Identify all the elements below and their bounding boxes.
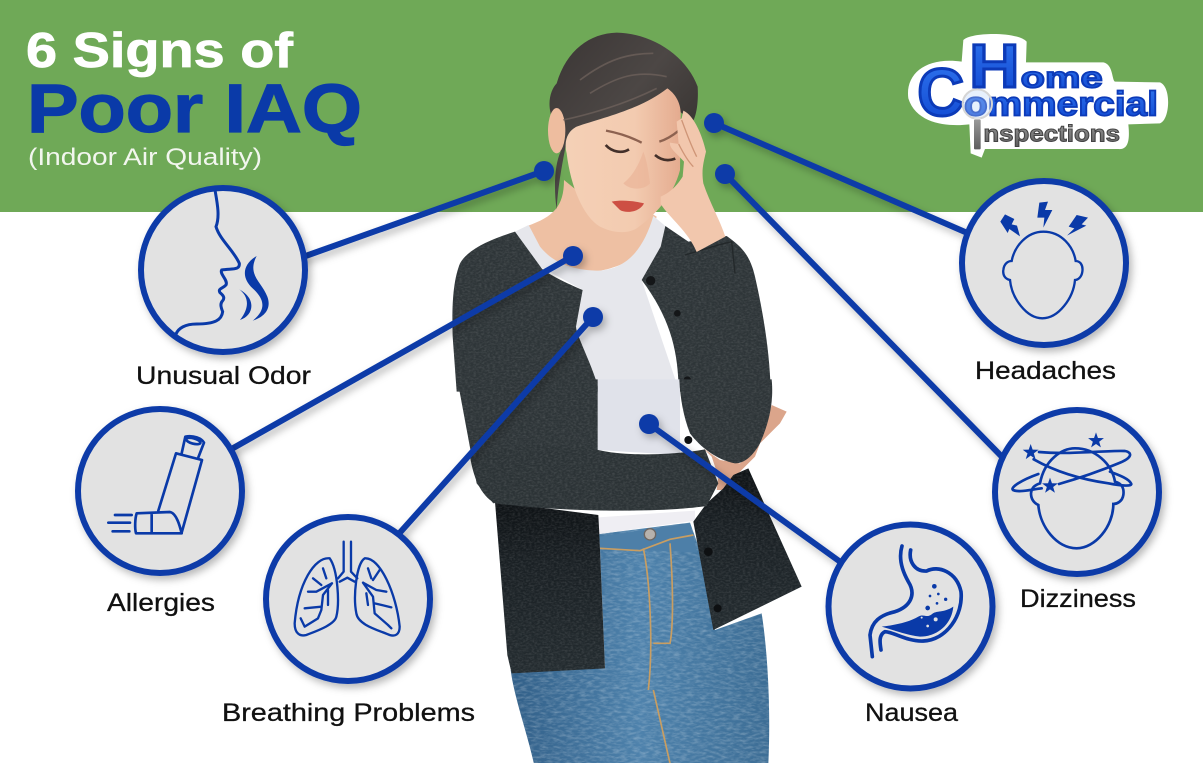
title line: 6 Signs of: 6 Signs of — [26, 24, 294, 78]
green header band — [0, 0, 1203, 212]
connector lines and dots — [228, 113, 1010, 566]
logo word: ome: ome — [1021, 62, 1103, 95]
neck — [525, 180, 657, 272]
waistband — [600, 523, 697, 553]
photo: woman with headache — [452, 33, 802, 763]
right hand — [703, 405, 787, 490]
ear — [548, 108, 565, 153]
lips — [612, 201, 644, 212]
nose shading — [623, 152, 650, 189]
cardigan buttons — [646, 276, 691, 384]
cardigan right front and sleeve — [642, 226, 771, 392]
panel: dizziness — [995, 410, 1159, 613]
label: breathing problems: Breathing Problems — [222, 699, 475, 727]
left cardigan column — [457, 379, 598, 503]
icon circle: nausea — [828, 524, 992, 688]
sleeve seam — [685, 242, 735, 273]
logo magnifier — [963, 89, 992, 150]
connector: headaches — [704, 113, 972, 235]
connector: breathing problems — [396, 307, 603, 537]
connector: allergies — [228, 246, 583, 451]
icon: head with lightning bolts — [1000, 202, 1088, 318]
cardigan left front — [452, 232, 599, 392]
finger lines — [679, 120, 697, 167]
icon: head with orbiting stars — [1013, 432, 1131, 548]
title — [26, 24, 362, 171]
cardigan lower buttons — [684, 436, 722, 612]
icon: stomach — [870, 546, 961, 657]
panel: unusual odor — [136, 188, 311, 390]
face — [566, 88, 681, 232]
t-shirt middle — [598, 379, 680, 455]
closed eyes — [606, 145, 675, 160]
title line: Poor IAQ: Poor IAQ — [27, 70, 362, 147]
logo word: C: C — [917, 57, 964, 131]
woman lower body — [457, 379, 802, 763]
icon circle: breathing problems — [266, 517, 430, 681]
cardigan lower right — [693, 468, 802, 630]
jeans — [511, 523, 769, 763]
logo word: ommercial: ommercial — [964, 86, 1158, 124]
logo word: H: H — [969, 32, 1019, 101]
label: unusual odor: Unusual Odor — [136, 362, 311, 390]
label: headaches: Headaches — [975, 357, 1116, 385]
icon: inhaler — [108, 436, 204, 533]
logo: Home Commercial Inspections — [908, 32, 1168, 158]
label: nausea: Nausea — [865, 699, 958, 727]
panel: allergies — [78, 409, 242, 617]
subtitle: (Indoor Air Quality) — [28, 144, 262, 171]
t-shirt — [515, 216, 680, 393]
panel: headaches — [962, 181, 1126, 385]
icon circle: dizziness — [995, 410, 1159, 574]
label: allergies: Allergies — [107, 589, 215, 617]
crossed sleeve — [470, 447, 718, 511]
panel: nausea — [828, 524, 992, 727]
upper sleeve — [679, 379, 772, 463]
icon: face profile with odor wisps — [176, 190, 269, 334]
connector: unusual odor — [300, 161, 554, 258]
label: dizziness: Dizziness — [1020, 585, 1136, 613]
hair back — [549, 33, 698, 209]
woman upper body — [452, 33, 771, 393]
jeans button — [644, 529, 656, 540]
hand on temple — [661, 111, 725, 252]
connector: dizziness — [715, 164, 1010, 465]
connector: nausea — [639, 414, 846, 566]
icon circle: headaches — [962, 181, 1126, 345]
icon circle: unusual odor — [141, 188, 305, 352]
cardigan lower left — [495, 502, 605, 673]
logo white backing — [908, 34, 1168, 158]
icon circle: allergies — [78, 409, 242, 573]
logo word: nspections: nspections — [983, 121, 1120, 147]
t-shirt hem — [598, 511, 695, 534]
panel: breathing problems — [222, 517, 475, 727]
icon: lungs — [295, 542, 400, 636]
fly stitching — [600, 535, 693, 763]
hair highlights and fringe — [563, 53, 667, 120]
eyebrows — [606, 131, 679, 143]
